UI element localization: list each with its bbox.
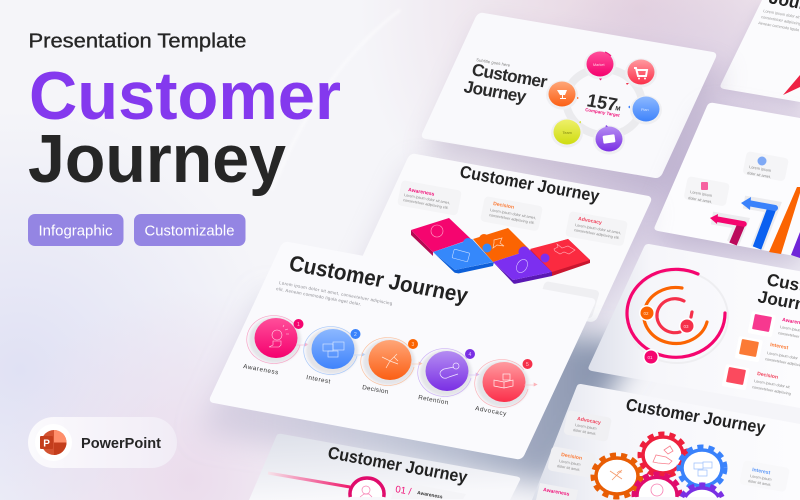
icon: chat — [323, 342, 344, 357]
slide title: Customer — [470, 59, 549, 92]
card: chart icon one: Lorem ipsum — [690, 190, 712, 198]
node: plan: Plan — [641, 108, 649, 112]
card: awareness — [536, 483, 578, 500]
item: decision: Decision — [757, 371, 778, 381]
tag: infographic: Infographic — [38, 224, 112, 240]
arrow: blue — [741, 197, 775, 248]
card: decision: dolor sit amet. — [557, 464, 581, 472]
node: market — [584, 50, 616, 80]
slide: top right partial — [720, 0, 800, 109]
icon: head — [269, 325, 289, 347]
slide title: Customer Journey — [624, 394, 767, 438]
piece: blue — [433, 238, 494, 274]
gear: purple — [682, 485, 722, 497]
tag: customizable: Customizable — [144, 224, 234, 240]
main slide shadow — [199, 294, 639, 484]
card: advocacy: Advocacy — [577, 416, 601, 426]
card: advocacy: dolor sit amet. — [573, 428, 597, 436]
arrow: purple — [791, 232, 800, 258]
gear: blue — [679, 447, 725, 489]
title: journey: Journey — [28, 121, 286, 197]
card: decision — [547, 446, 596, 478]
step 4: retention: Retention — [418, 394, 449, 407]
timeline node — [350, 478, 384, 497]
card: decision: Decision — [561, 452, 582, 462]
item: awareness — [748, 311, 800, 339]
node: trophy — [546, 80, 579, 110]
slide: circular chart — [588, 244, 800, 408]
step 1: awareness: Awareness — [243, 363, 279, 376]
slide body text: elit. Aenean commodo ligula eget dolor. — [276, 286, 362, 307]
card: advocacy: consectetuer adipiscing elit. — [574, 228, 620, 240]
piece: purple — [493, 246, 552, 284]
arrow: pink — [710, 214, 744, 244]
gear: orange — [593, 455, 641, 497]
card: advocacy: Lorem ipsum — [575, 423, 597, 431]
step 1: awareness — [243, 316, 308, 376]
card: advocacy — [563, 410, 612, 442]
card: interest: Interest — [752, 467, 771, 476]
step 3: decision: Decision — [362, 384, 389, 396]
card: awareness — [397, 180, 462, 216]
slide: main five steps — [208, 241, 597, 460]
puzzle graphic — [411, 218, 590, 284]
card: advocacy — [565, 211, 628, 246]
card: interest — [739, 460, 790, 492]
icon: book and gift — [494, 374, 513, 388]
node 01: 01 — [648, 355, 653, 360]
step 1: awareness: 1 — [297, 322, 300, 328]
center figure: M — [615, 105, 621, 113]
node: card — [593, 125, 625, 154]
slide title: Customer Journey — [287, 250, 471, 308]
item: interest: Interest — [770, 342, 789, 351]
card: awareness: consectetuer adipiscing elit. — [403, 198, 449, 210]
slide title: Customer Journey — [458, 161, 601, 206]
ring chart — [626, 269, 728, 365]
card: chart icon two: Lorem ipsum — [749, 165, 771, 173]
card: advocacy: Advocacy — [578, 216, 602, 226]
item: awareness: consectetuer — [778, 331, 800, 339]
step 2: interest: 2 — [354, 332, 357, 338]
slide body text: Lorem ipsum dolor sit amet, consectetuer adipiscing — [279, 280, 393, 306]
slide: gears — [532, 384, 800, 500]
node: plan — [628, 96, 662, 124]
center figure: Company Target — [585, 107, 621, 118]
item: decision: Lorem ipsum dolor sit — [754, 379, 791, 390]
heading: presentation template: Presentation Template — [28, 30, 246, 52]
arrow: orange — [769, 187, 800, 254]
card: interest: Lorem ipsum — [750, 474, 772, 482]
slide subtitle: Subtitle goes here — [476, 57, 511, 68]
step 5: advocacy — [475, 359, 537, 418]
connector ring — [561, 63, 647, 141]
step 2: interest — [304, 327, 365, 385]
badge: powerpoint — [28, 417, 177, 468]
slide title: Customer Journey — [326, 442, 469, 487]
node: cart — [625, 58, 657, 88]
node: team: Team — [562, 131, 572, 135]
node: team — [551, 118, 583, 148]
icon: magnet — [440, 363, 459, 378]
card: chart icon two — [742, 151, 789, 182]
icon: powerpoint logo: P — [43, 438, 50, 450]
step 5: advocacy: 5 — [526, 362, 529, 368]
node 03: 03 — [684, 324, 689, 329]
step 5: advocacy: Advocacy — [475, 405, 508, 418]
card: decision: consectetuer adipiscing elit. — [489, 213, 535, 225]
card: decision: Lorem ipsum dolor sit amet, — [490, 208, 536, 220]
center figure: 157 — [585, 89, 619, 115]
slide: arrows — [654, 103, 800, 266]
item: interest: Lorem ipsum dolor — [767, 351, 799, 361]
tag: infographic — [28, 214, 124, 246]
gear: magenta — [634, 474, 680, 497]
slide title: Journey — [462, 76, 529, 107]
card: chart icon two: dolor sit amet. — [747, 171, 771, 179]
gear: red — [640, 434, 686, 476]
step 3: decision — [361, 338, 422, 396]
slide title — [756, 269, 800, 318]
slide: top right partial: Aenean commodo ligula — [758, 20, 800, 32]
card: decision: Lorem ipsum — [559, 459, 581, 467]
badge: powerpoint: PowerPoint — [81, 436, 161, 452]
slide: top right partial: Lorem ipsum dolor sit — [763, 8, 800, 20]
card: decision — [480, 196, 543, 231]
step 4: retention — [418, 349, 479, 407]
tag: customizable — [134, 214, 246, 246]
icon: sprout — [382, 354, 398, 368]
title: customer: Customer — [29, 58, 341, 134]
card: awareness: Lorem ipsum dolor sit amet, — [404, 193, 450, 205]
slide: customer journey cycle — [420, 12, 724, 198]
item: 01 awareness: 01 / — [395, 484, 412, 498]
icon: powerpoint logo — [40, 430, 66, 455]
piece: pink — [411, 218, 471, 256]
item: 01 awareness — [391, 481, 466, 500]
ghost card — [537, 281, 600, 319]
card: chart icon one: dolor sit amet. — [688, 196, 712, 204]
slide: puzzle — [350, 153, 653, 333]
node 02: 02 — [644, 311, 649, 316]
step 3: decision: 3 — [412, 342, 414, 348]
item: decision — [722, 364, 791, 396]
card: decision: Decision — [493, 201, 514, 211]
piece: orange — [473, 228, 530, 262]
node: market: Market — [593, 63, 606, 67]
card: awareness: Awareness — [543, 487, 570, 498]
item: interest — [735, 336, 800, 368]
step 2: interest: Interest — [306, 374, 331, 385]
piece: red — [530, 239, 590, 276]
card: awareness: Awareness — [408, 187, 435, 198]
card: chart icon one — [683, 176, 730, 207]
card: interest: dolor sit amet. — [748, 479, 772, 487]
timeline bar — [268, 473, 350, 487]
item: decision: consectetuer adipiscing — [752, 385, 791, 396]
card: advocacy: Lorem ipsum dolor sit amet, — [575, 223, 621, 235]
slide: bottom timeline — [249, 434, 520, 500]
slide title — [462, 59, 549, 107]
step 4: retention: 4 — [468, 352, 472, 358]
